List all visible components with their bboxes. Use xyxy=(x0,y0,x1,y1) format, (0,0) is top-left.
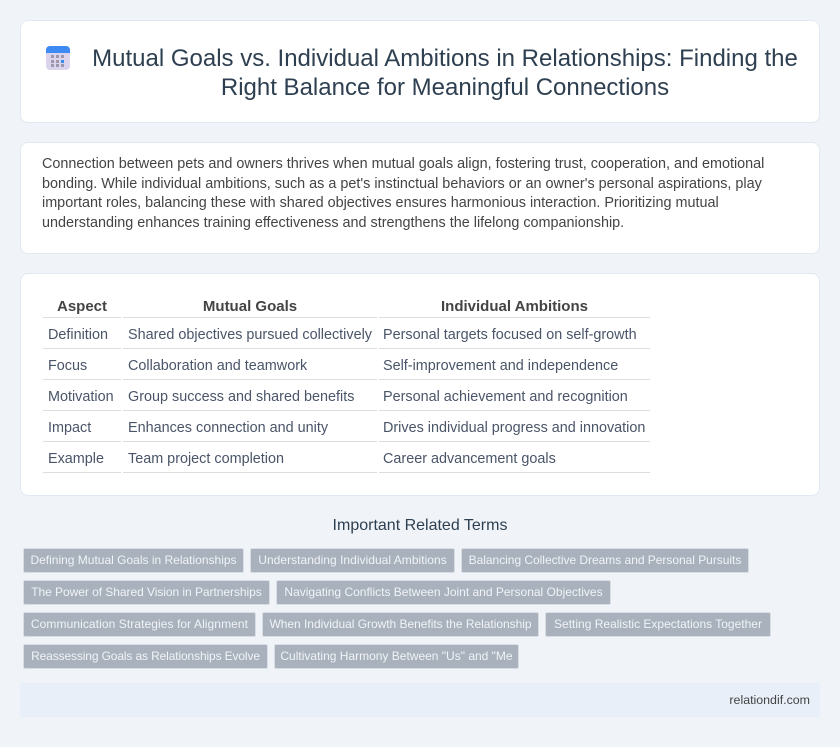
tags: related terms: Setting Realistic Expectations Together xyxy=(554,617,762,631)
panel: comparison table: Group success and shared benefits xyxy=(128,389,354,405)
row: focus: Focus xyxy=(48,358,87,374)
row: definition: Definition xyxy=(48,327,108,343)
panel: comparison table: Shared objectives pursued collectively xyxy=(128,327,372,343)
intro text xyxy=(42,156,764,231)
panel: comparison table: Personal achievement and recognition xyxy=(383,389,628,405)
panel: comparison table: Personal targets focused on self-growth xyxy=(383,327,637,343)
heading: important related terms: Important Related Terms xyxy=(333,517,507,534)
panel: title header xyxy=(20,20,820,123)
table header: Aspect xyxy=(57,298,107,315)
panel: comparison table: Individual Ambitions xyxy=(441,298,588,315)
panel: comparison table: Self-improvement and independence xyxy=(383,358,618,374)
panel: comparison table xyxy=(20,273,820,496)
panel: comparison table: Drives individual progress and innovation xyxy=(383,420,645,436)
tags: related terms xyxy=(23,548,771,669)
footer bar xyxy=(20,683,820,717)
row: motivation: Motivation xyxy=(48,389,114,405)
tags: related terms: Balancing Collective Dreams and Personal Pursuits xyxy=(469,553,741,567)
row: impact: Impact xyxy=(48,420,91,436)
panel: comparison table: Career advancement goals xyxy=(383,451,556,467)
panel: comparison table: Team project completion xyxy=(128,451,284,467)
panel: introduction xyxy=(20,142,820,254)
intro text: Connection between pets and owners thrives when mutual goals align, fostering trust, cooperation, and emotional xyxy=(42,156,764,172)
footer source: relationdif.com xyxy=(729,693,810,707)
tags: related terms: Defining Mutual Goals in Relationships xyxy=(30,553,237,567)
panel: comparison table: Collaboration and teamwork xyxy=(128,358,307,374)
tags: related terms: Communication Strategies for Alignment xyxy=(31,617,248,631)
intro text: important roles, balancing these with shared objectives ensures harmonious interaction. Prioritizing mutual xyxy=(42,195,719,211)
tags: related terms: Understanding Individual Ambitions xyxy=(258,553,447,567)
tags: related terms: Reassessing Goals as Relationships Evolve xyxy=(31,649,260,663)
intro text: understanding enhances training effectiveness and strengthens the lifelong companionship. xyxy=(42,215,624,231)
tags: related terms: When Individual Growth Benefits the Relationship xyxy=(269,617,532,631)
tags: related terms: The Power of Shared Vision in Partnerships xyxy=(31,585,262,599)
icon: calendar xyxy=(46,46,70,70)
intro text: bonding. While individual ambitions, such as a pet's instinctual behaviors or an owner's personal aspirations, play xyxy=(42,176,762,192)
row: example: Example xyxy=(48,451,104,467)
title: Mutual Goals vs. Individual Ambitions in Relationships: Finding the Right Balance for Meaningful Connections xyxy=(92,45,798,101)
panel: comparison table: Mutual Goals xyxy=(203,298,297,315)
tags: related terms: Navigating Conflicts Between Joint and Personal Objectives xyxy=(284,585,603,599)
tags: related terms: Cultivating Harmony Between "Us" and "Me xyxy=(280,649,513,663)
panel: comparison table: Enhances connection and unity xyxy=(128,420,328,436)
